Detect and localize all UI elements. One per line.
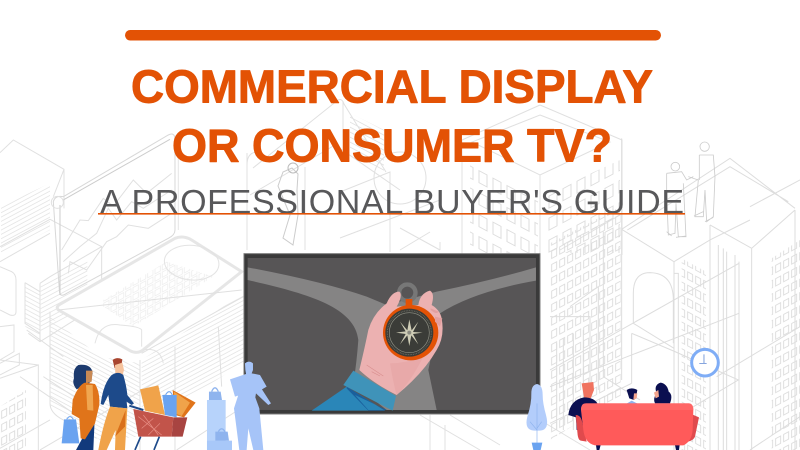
forked road xyxy=(248,267,536,410)
subtitle with underline: A PROFESSIONAL BUYER'S GUIDE xyxy=(100,184,684,222)
background: isometric line-art cityscape xyxy=(0,100,800,450)
wall clock xyxy=(692,349,718,376)
mannequin and display podium xyxy=(207,362,271,450)
fingers xyxy=(431,308,442,327)
title: OR CONSUMER TV? xyxy=(172,120,612,172)
figure xyxy=(230,362,271,450)
man xyxy=(98,358,134,450)
title: COMMERCIAL DISPLAY xyxy=(131,61,653,113)
woman with bag xyxy=(62,365,99,450)
sofa xyxy=(576,403,699,450)
compass xyxy=(383,299,438,360)
child xyxy=(626,388,638,404)
woman xyxy=(654,383,671,403)
shopping cart with goods xyxy=(129,385,196,450)
TV screen with hand holding compass xyxy=(244,254,540,414)
shoppers group xyxy=(62,358,196,450)
sleeve xyxy=(312,387,385,411)
potted plant xyxy=(526,384,547,450)
top accent bar xyxy=(125,30,661,40)
title xyxy=(131,61,653,172)
man xyxy=(568,382,598,430)
right line art: towers, windows and handshake figures xyxy=(550,138,800,450)
hand xyxy=(359,291,443,395)
podium with bags xyxy=(207,388,232,450)
centre line art: towers, roof and sketch figure xyxy=(247,100,622,450)
compass ring xyxy=(397,282,418,303)
family on sofa xyxy=(526,349,718,450)
left line art: towers, monitor and laptop xyxy=(0,134,243,450)
